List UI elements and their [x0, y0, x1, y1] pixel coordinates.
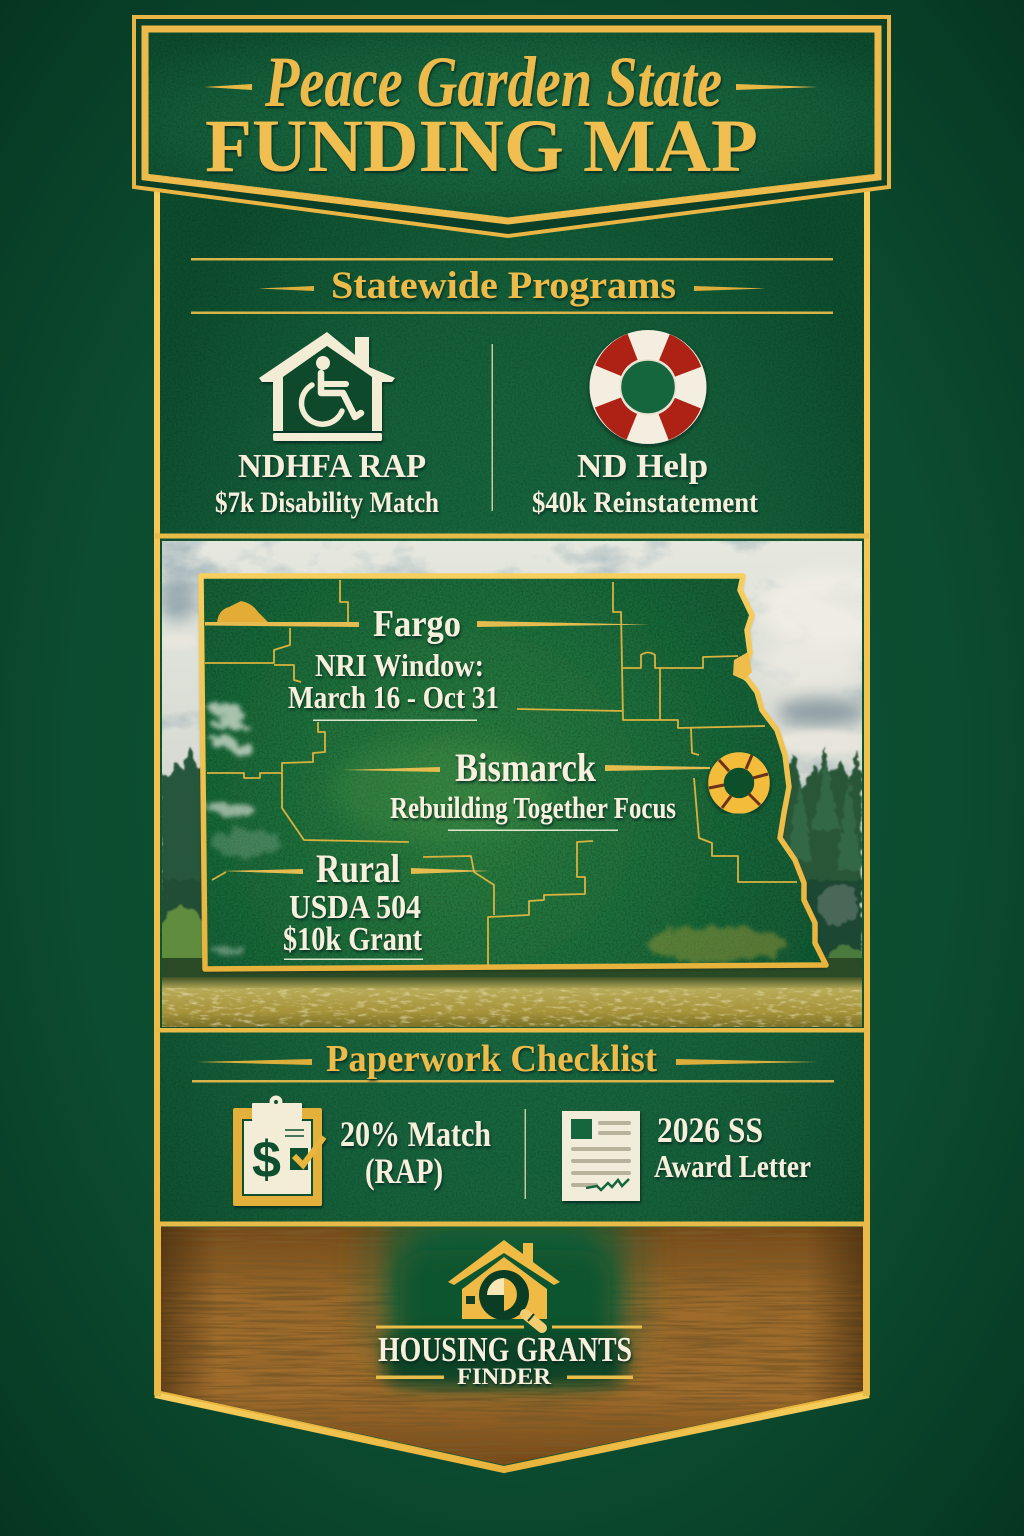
logo: housing grants finder: HOUSING GRANTS	[378, 1330, 632, 1369]
callout: Rural: Rural	[316, 846, 400, 891]
callout: Fargo	[205, 603, 650, 721]
text: 20% match: (RAP)	[365, 1151, 443, 1191]
heading: statewide programs	[191, 258, 833, 314]
panel: title banner	[134, 17, 889, 236]
title script line: Peace Garden State	[264, 42, 722, 122]
icon: accessible house	[259, 332, 395, 441]
heading: statewide programs: Statewide Programs	[331, 264, 676, 307]
cloud reflections on map	[203, 698, 279, 955]
icon: gold life ring on map	[709, 755, 768, 808]
text: NDHFA RAP	[215, 448, 439, 519]
section rules	[155, 534, 869, 1226]
map of North Dakota	[195, 570, 835, 975]
callout: Bismarck: Bismarck	[455, 745, 597, 790]
icon: clipboard: $	[252, 1131, 281, 1189]
panel: map scene	[154, 541, 900, 1027]
callout: Rural: $10k Grant	[283, 921, 423, 958]
callout: Bismarck: Rebuilding Together Focus	[390, 790, 676, 825]
heading: paperwork checklist: Paperwork Checklist	[326, 1038, 657, 1080]
title main line: FUNDING MAP	[205, 105, 758, 188]
yellow shrubs on map	[645, 927, 785, 963]
divider: statewide columns	[492, 344, 493, 511]
text: ND Help	[532, 448, 758, 519]
callout: Rural: USDA 504	[289, 889, 421, 926]
callout: Fargo: Fargo	[373, 603, 461, 645]
treeline under map	[162, 958, 862, 977]
icon: clipboard	[233, 1096, 324, 1206]
panel: wood footer	[155, 1195, 869, 1470]
text: 20% match: 20% Match	[340, 1114, 491, 1154]
title dashes	[204, 84, 818, 90]
text: 20% match	[340, 1114, 491, 1191]
text: NDHFA RAP: NDHFA RAP	[238, 448, 426, 485]
text: 2026 SS award letter: Award Letter	[654, 1148, 811, 1184]
callout: Fargo: NRI Window:	[315, 647, 484, 683]
heading: paperwork checklist	[192, 1038, 834, 1082]
callout: Bismarck	[343, 745, 710, 831]
callout: Rural	[221, 846, 490, 960]
callout: Fargo: March 16 - Oct 31	[288, 679, 499, 715]
forest left	[162, 746, 202, 958]
county lines	[205, 580, 797, 968]
text: 2026 SS award letter: 2026 SS	[657, 1110, 763, 1150]
icon: award letter	[562, 1111, 640, 1201]
forest right	[782, 746, 862, 958]
icon: gold hill	[217, 601, 269, 623]
icon: lake blob	[733, 652, 752, 680]
text: ND Help: ND Help	[577, 448, 708, 485]
main banner panel	[157, 185, 867, 1470]
text: 2026 SS award letter	[654, 1110, 811, 1184]
text: ND Help: $40k Reinstatement	[532, 486, 758, 519]
meadow	[162, 977, 862, 1027]
text: NDHFA RAP: $7k Disability Match	[215, 486, 439, 519]
logo: housing grants finder: FINDER	[457, 1364, 551, 1389]
logo: housing grants finder	[376, 1240, 642, 1389]
divider: checklist columns	[524, 1109, 526, 1199]
icon: house with magnifier	[448, 1240, 560, 1328]
icon: life ring	[590, 330, 706, 444]
